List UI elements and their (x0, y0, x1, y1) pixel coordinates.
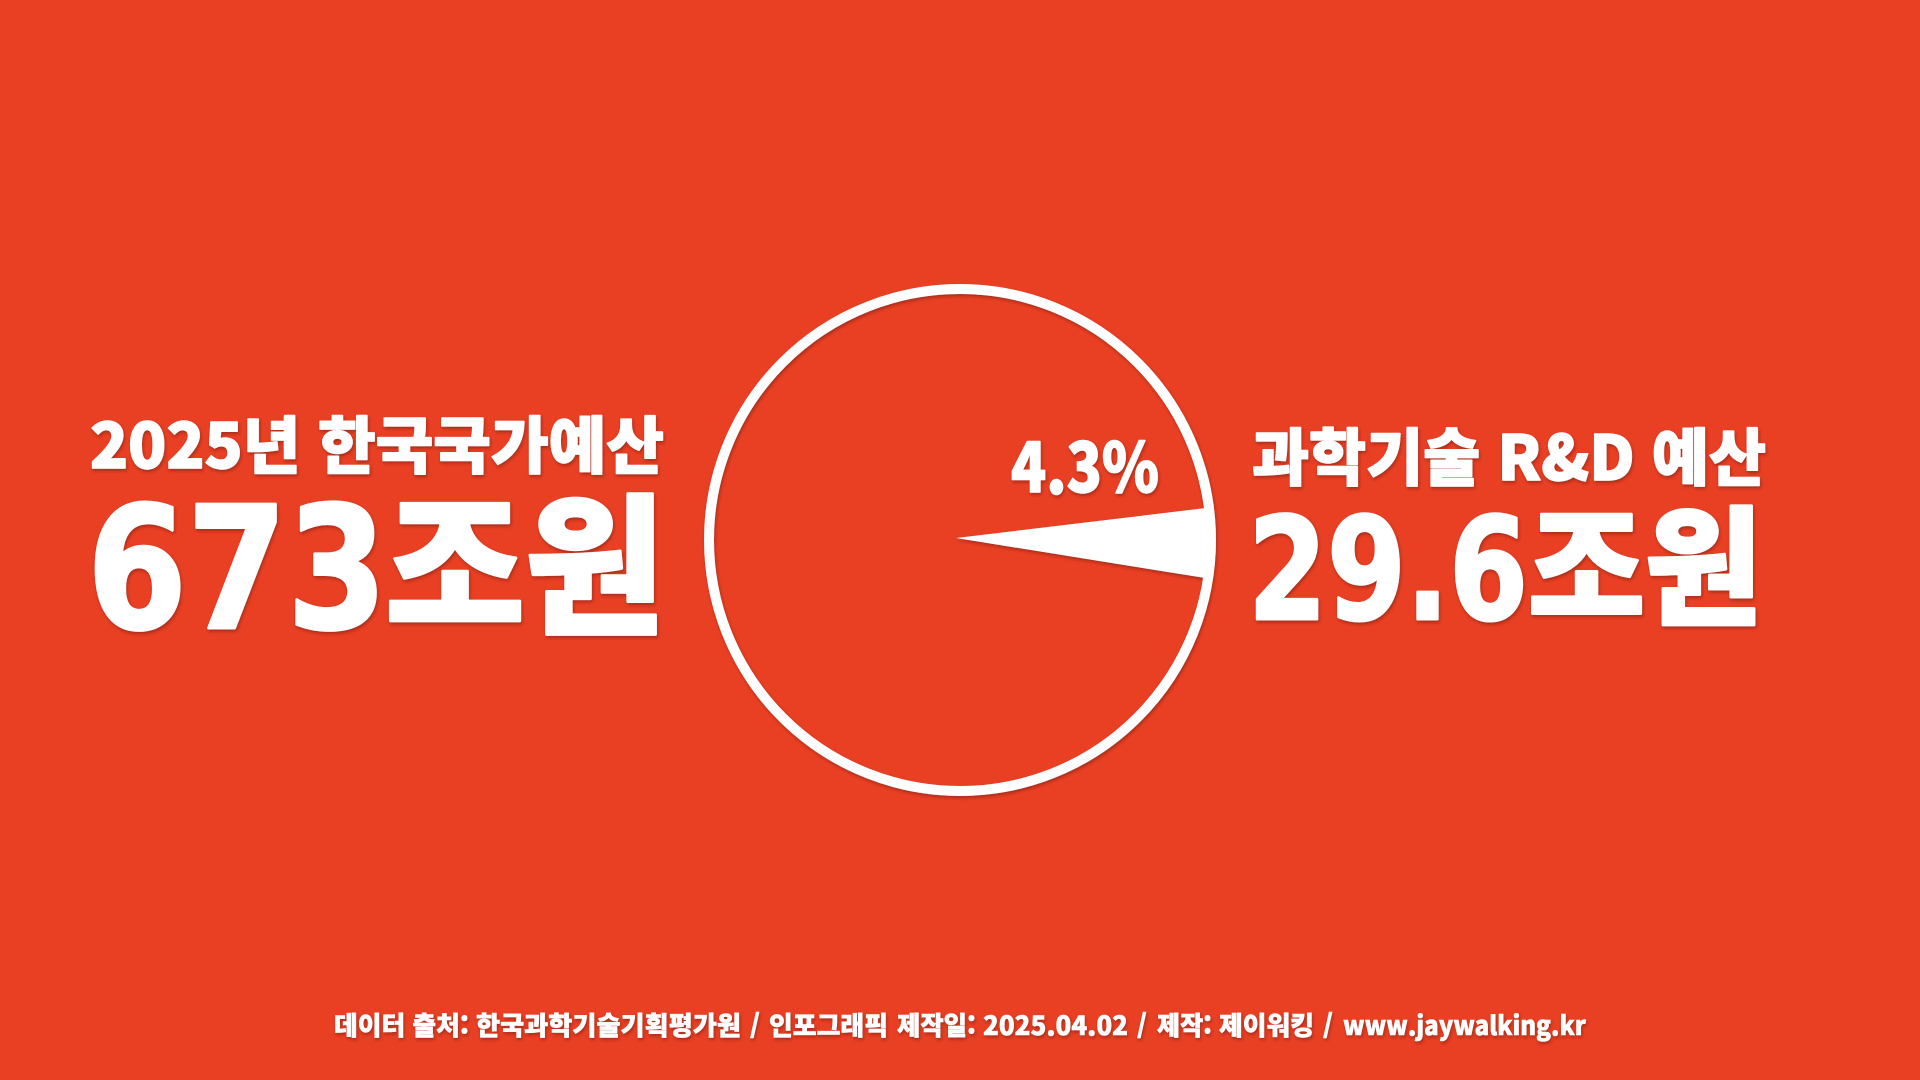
footer: source and credits: 데이터 출처: (334, 1006, 469, 1043)
right heading: science and technology R&D budget: 과학기술 R&D 예산 (1252, 408, 1766, 498)
right figure: 29.6조원 (1248, 466, 1762, 653)
right figure: 29.6조원: 29.6 (1248, 488, 1528, 653)
left figure: 673조원 (87, 446, 665, 669)
footer: source and credits: 제작: (1157, 1006, 1212, 1043)
footer: source and credits: 한국과학기술기획평가원 (476, 1006, 741, 1043)
footer: source and credits: 제이워킹 (1219, 1006, 1314, 1043)
pie chart: 4.3% share (709, 289, 1211, 791)
right figure: 29.6조원: 조원 (1528, 466, 1762, 651)
pie slice (956, 508, 1209, 578)
left figure: 673조원: 673 (87, 471, 387, 669)
pie label: 4.3%: 4.3% (1011, 413, 1159, 512)
footer: source and credits: www.jaywalking.kr (1343, 1006, 1587, 1043)
footer: source and credits: / (1323, 1006, 1333, 1043)
footer: source and credits (334, 1006, 1587, 1043)
footer: source and credits: 인포그래픽 (769, 1006, 888, 1043)
footer: source and credits: / (1137, 1006, 1147, 1043)
footer: source and credits: 제작일: (897, 1006, 976, 1043)
left heading: 2025 national budget: 2025년 한국국가예산 (90, 396, 664, 486)
footer: source and credits: 2025.04.02 (983, 1006, 1128, 1043)
left figure: 673조원: 조원 (385, 446, 665, 666)
footer: source and credits: / (750, 1006, 760, 1043)
